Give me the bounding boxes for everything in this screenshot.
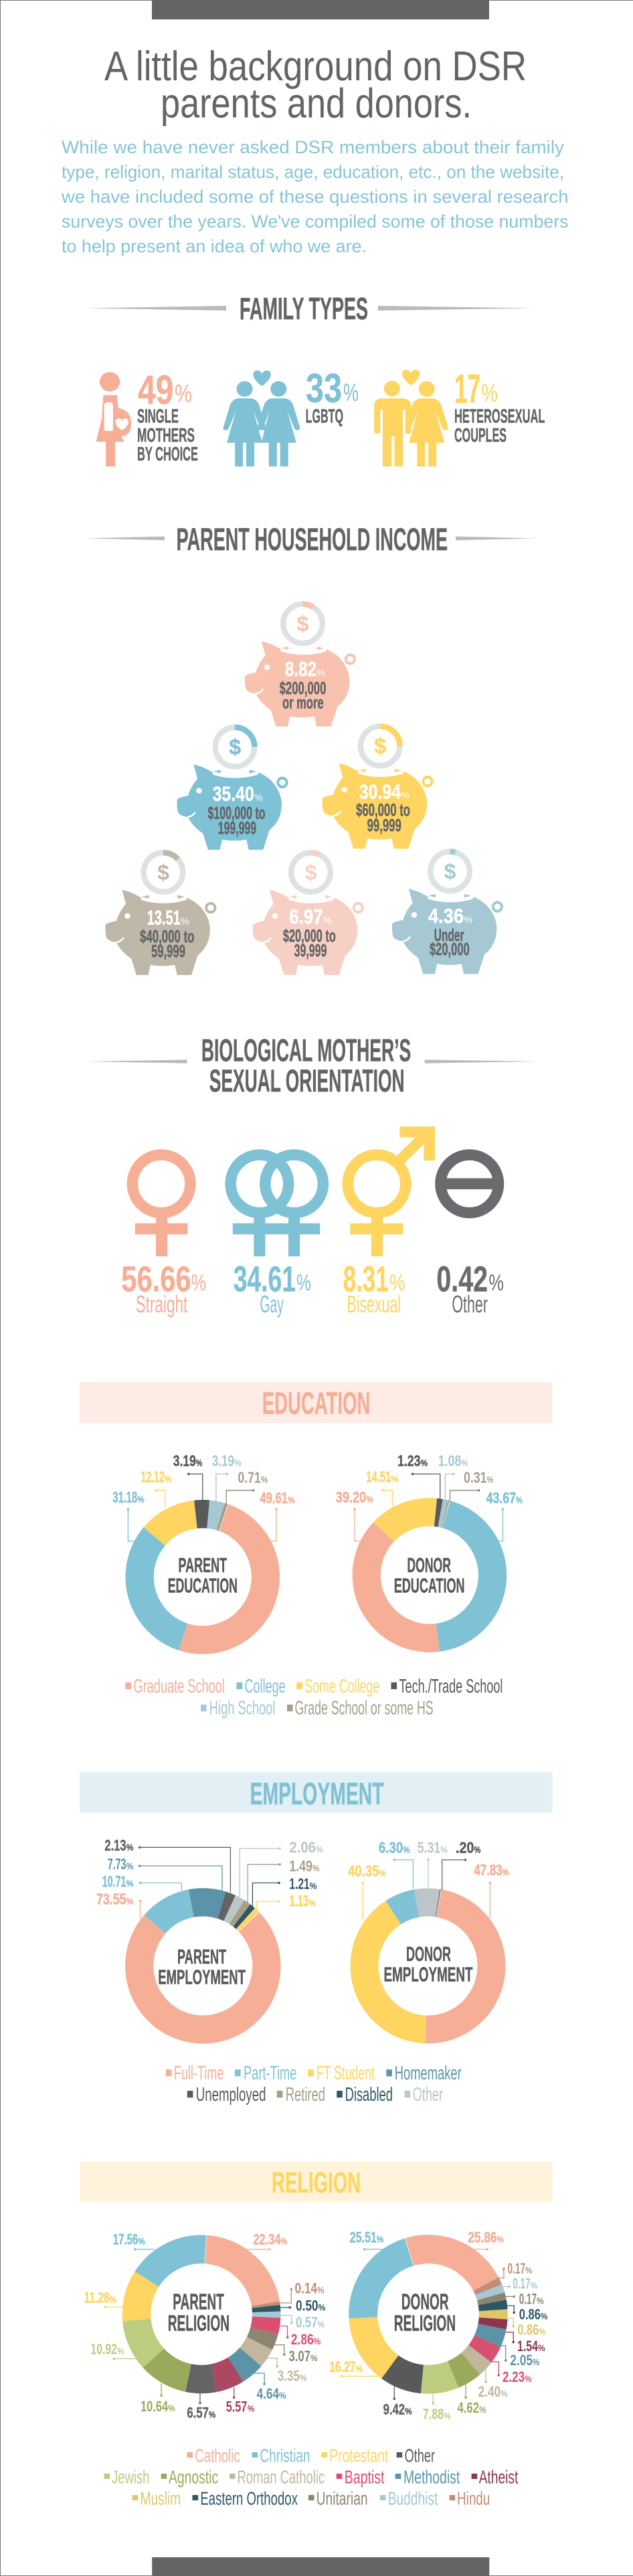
piggy bank: $200,000 or more: $ [297, 612, 309, 636]
stat: straight: 56.66 [121, 1260, 191, 1300]
stat: single mothers by choice: SINGLE [137, 406, 179, 427]
values: parent employment: 7.73 [108, 1855, 126, 1873]
heading: biological mother's sexual orientation [86, 1032, 539, 1098]
legend: religion: Hindu [457, 2488, 490, 2509]
stat: heterosexual couples: HETEROSEXUAL [454, 406, 545, 427]
piggy bank: under $20,000: 4.36 [428, 904, 464, 928]
values: parent religion: % [168, 2403, 175, 2413]
values: parent religion: % [314, 2336, 321, 2346]
leader lines: parent employment [139, 1846, 281, 1919]
stat: other: % [488, 1270, 504, 1296]
legend: education: Some College [304, 1676, 379, 1697]
donut label: parent employment [158, 1945, 246, 1989]
values: parent employment: 2.13 [104, 1836, 126, 1854]
values: donor religion: 25.51 [350, 2229, 377, 2245]
values: parent employment: % [308, 1897, 316, 1908]
donut label: parent religion: PARENT [173, 2290, 224, 2314]
values: parent religion: % [209, 2409, 216, 2419]
values: donor religion: % [479, 2404, 486, 2415]
values: parent religion: 5.57 [226, 2398, 247, 2415]
values: parent religion: % [110, 2294, 116, 2305]
values: parent education: 3.19 [212, 1452, 234, 1469]
values: parent education: 31.18 [112, 1488, 137, 1506]
legend: education: College [245, 1676, 286, 1697]
values: donor religion: % [531, 2280, 537, 2291]
stat: LGBTQ: 33 [306, 365, 342, 411]
values: donor employment: % [440, 1844, 448, 1855]
stat: heterosexual couples [454, 366, 545, 446]
stat: single mothers by choice: MOTHERS [137, 425, 195, 446]
donut chart: donor employment [354, 1892, 502, 2039]
legend: education [126, 1676, 503, 1719]
piggy bank: $20,000 to 39,999 [253, 853, 363, 975]
top bar [152, 0, 489, 19]
donut label: parent education [168, 1553, 238, 1598]
piggy bank: $100,000 to 199,999: 35.40 [213, 782, 254, 806]
values: donor religion: 0.17 [508, 2260, 525, 2277]
values: parent education: 3.19 [173, 1452, 196, 1469]
piggy bank: under $20,000: $ [444, 859, 456, 883]
values: donor religion: 2.05 [510, 2352, 533, 2369]
values: donor education: 43.67 [486, 1489, 516, 1507]
leader lines: parent religion [104, 2248, 293, 2404]
legend: religion: Methodist [403, 2467, 460, 2487]
values: parent religion: % [138, 2236, 145, 2247]
values: parent employment: % [126, 1878, 134, 1889]
legend: religion: Catholic [195, 2445, 240, 2466]
values: donor religion: % [533, 2356, 540, 2367]
values: parent employment: % [126, 1895, 134, 1906]
legend: religion: Unitarian [316, 2488, 368, 2509]
piggy bank: $20,000 to 39,999: 39,999 [294, 940, 327, 960]
stat: straight: % [191, 1270, 206, 1296]
values: donor religion: % [405, 2405, 412, 2416]
values: parent religion: 22.34 [253, 2231, 281, 2248]
leader lines: donor education [353, 1473, 504, 1541]
stat: bisexual [343, 1260, 405, 1318]
values: parent employment: 1.49 [289, 1857, 312, 1875]
stat: single mothers by choice: % [175, 380, 192, 408]
values: parent religion: 17.56 [113, 2231, 138, 2248]
values: parent religion [84, 2231, 326, 2421]
values: parent employment: 10.71 [102, 1873, 126, 1890]
values: donor religion: % [525, 2373, 532, 2384]
values: donor employment: 40.35 [348, 1862, 379, 1879]
donut label: donor religion: DONOR [401, 2290, 449, 2314]
legend: religion [104, 2445, 519, 2509]
values: donor education: 1.23 [397, 1452, 420, 1469]
values: donor employment: % [403, 1844, 410, 1855]
stat: bisexual: Bisexual [347, 1290, 401, 1318]
values: donor religion: 0.86 [517, 2322, 539, 2338]
donut chart: parent employment [113, 1876, 293, 2056]
values: donor employment [348, 1838, 509, 1879]
piggy bank: $60,000 to 99,999: % [401, 790, 410, 802]
piggy bank: $20,000 to 39,999: $20,000 to [283, 926, 336, 946]
legend: religion: Christian [260, 2445, 310, 2466]
title: parents and donors. [161, 80, 472, 127]
donut label: donor employment [384, 1942, 473, 1986]
icon: man and woman with heart [374, 370, 448, 466]
values: donor employment: 47.83 [474, 1861, 502, 1879]
donut label: parent religion: RELIGION [168, 2311, 230, 2336]
values: parent religion: % [300, 2373, 307, 2383]
piggy bank: $200,000 or more [245, 604, 355, 727]
piggy bank: under $20,000: % [464, 914, 472, 926]
values: donor employment: % [379, 1867, 386, 1878]
legend: religion: Baptist [345, 2467, 385, 2487]
stat: gay: Gay [260, 1290, 284, 1318]
values: parent religion: 0.50 [296, 2298, 319, 2314]
piggy bank: $40,000 to 59,999 [105, 853, 215, 975]
piggy bank: $20,000 to 39,999: $ [305, 860, 317, 884]
values: parent education: 49.61 [260, 1489, 288, 1507]
legend: employment: Homemaker [395, 2063, 462, 2084]
values: donor religion: 1.54 [517, 2338, 539, 2354]
values: parent education: % [137, 1494, 145, 1505]
values: donor religion [329, 2229, 548, 2422]
banner: employment [80, 1772, 553, 1812]
values: donor religion: 0.17 [519, 2291, 537, 2308]
values: parent employment: % [310, 1881, 317, 1891]
intro paragraph: surveys over the years. We've compiled some of those numbers [62, 211, 569, 232]
heading: family types: FAMILY TYPES [240, 291, 368, 326]
leader lines: donor religion [341, 2248, 515, 2405]
banner: religion: RELIGION [272, 2166, 361, 2199]
values: donor education: % [366, 1494, 373, 1505]
intro paragraph: we have included some of these questions in several research [61, 187, 569, 207]
values: parent religion: 11.28 [84, 2290, 110, 2306]
values: donor religion: 16.27 [329, 2358, 355, 2375]
donut label: donor employment: DONOR [406, 1942, 451, 1966]
donut chart: donor education [352, 1498, 507, 1652]
legend: religion: Protestant [329, 2445, 388, 2466]
stat: single mothers by choice [137, 367, 198, 465]
values: parent religion: 3.35 [278, 2368, 300, 2385]
legend: religion: Roman Catholic [237, 2467, 325, 2487]
stat: LGBTQ: LGBTQ [306, 406, 343, 427]
legend: religion: Eastern Orthodox [200, 2488, 298, 2509]
piggy bank: $100,000 to 199,999: 199,999 [218, 818, 256, 838]
bottom bar [152, 2557, 489, 2576]
piggy bank: $100,000 to 199,999 [177, 727, 287, 850]
values: donor religion: % [539, 2326, 546, 2337]
donut label: parent employment: PARENT [177, 1945, 226, 1968]
values: donor religion: % [496, 2233, 504, 2244]
values: parent religion: 10.64 [141, 2398, 169, 2415]
values: parent religion: % [317, 2285, 325, 2296]
icon: pregnant single mother [96, 372, 131, 466]
values: donor employment: 6.30 [379, 1838, 403, 1856]
piggy bank: under $20,000: Under [434, 925, 464, 945]
values: donor religion: 9.42 [383, 2401, 405, 2417]
donut label: donor education: DONOR [407, 1553, 451, 1577]
piggy bank: $60,000 to 99,999: 99,999 [367, 815, 401, 835]
title [104, 44, 527, 127]
piggy bank: $60,000 to 99,999 [323, 726, 432, 849]
stat: straight [121, 1260, 206, 1318]
values: parent religion: % [317, 2318, 325, 2329]
values: donor religion: % [538, 2342, 545, 2353]
stat: gay [234, 1260, 311, 1318]
stat: gay: % [296, 1270, 311, 1296]
stat: other: Other [452, 1290, 488, 1318]
icon: female symbol [132, 1155, 190, 1256]
piggy bank: $40,000 to 59,999: $ [157, 860, 169, 884]
legend: employment: FT Student [316, 2063, 375, 2084]
banner: employment: EMPLOYMENT [250, 1776, 384, 1811]
values: donor religion: 7.88 [423, 2405, 444, 2422]
legend: education: Tech./Trade School [399, 1676, 503, 1697]
values: parent education: % [165, 1474, 172, 1484]
stat: heterosexual couples: 17 [454, 366, 480, 412]
values: donor religion: 2.23 [503, 2369, 525, 2385]
values: parent religion: 3.07 [289, 2348, 310, 2365]
values: parent religion: % [248, 2403, 255, 2413]
values: donor education: % [391, 1474, 399, 1484]
legend: religion: Agnostic [169, 2467, 218, 2487]
donut chart: donor religion [347, 2233, 509, 2395]
values: parent religion: 0.57 [296, 2314, 317, 2330]
donut label: parent employment: EMPLOYMENT [158, 1965, 246, 1989]
donut label: donor education [394, 1553, 464, 1598]
values: donor education: 1.08 [438, 1452, 461, 1469]
stat: other [436, 1260, 504, 1318]
legend: employment: Unemployed [196, 2084, 266, 2106]
values: parent education: % [288, 1494, 295, 1505]
leader lines: donor employment [361, 1859, 491, 1921]
piggy bank: $60,000 to 99,999: 30.94 [359, 780, 401, 804]
stat: straight: Straight [136, 1290, 187, 1318]
values: donor religion: 0.17 [513, 2276, 531, 2292]
legend: employment: Other [413, 2084, 443, 2106]
piggy bank: $40,000 to 59,999: % [181, 916, 189, 927]
values: donor education: 39.20 [336, 1488, 366, 1506]
values: donor education: % [516, 1494, 523, 1505]
legend: education: High School [209, 1697, 275, 1719]
values: parent education: 0.71 [238, 1469, 261, 1486]
values: parent religion: % [279, 2390, 286, 2401]
values: donor education: 0.31 [464, 1469, 487, 1486]
values: donor religion: % [537, 2296, 544, 2306]
values: donor religion: % [377, 2233, 384, 2244]
values: donor employment: % [502, 1867, 509, 1877]
values: donor education: 14.51 [366, 1468, 391, 1486]
icon: female and male symbol [348, 1126, 435, 1256]
piggy bank: $20,000 to 39,999: 6.97 [289, 905, 323, 928]
values: donor employment: % [474, 1844, 481, 1855]
donut label: parent education: PARENT [178, 1553, 227, 1577]
values: donor education [336, 1452, 523, 1507]
values: parent employment: % [126, 1861, 134, 1871]
banner: education: EDUCATION [262, 1385, 370, 1420]
values: donor religion: % [541, 2310, 548, 2321]
values: donor education: % [461, 1457, 468, 1468]
stat: heterosexual couples: COUPLES [454, 425, 507, 446]
legend: religion: Muslim [141, 2488, 181, 2509]
values: parent religion: % [117, 2346, 124, 2356]
values: parent religion: % [310, 2352, 318, 2363]
icon: other symbol [440, 1155, 499, 1213]
heading: family types [86, 291, 535, 326]
piggy bank: $200,000 or more: or more [282, 692, 324, 712]
piggy bank: $100,000 to 199,999: $ [229, 735, 241, 759]
values: parent religion: 10.92 [90, 2341, 117, 2358]
values: parent employment: 2.06 [289, 1838, 316, 1856]
intro paragraph: type, religion, marital status, age, education, etc., on the website, [62, 162, 564, 182]
intro paragraph [61, 137, 569, 256]
stat: bisexual: 8.31 [343, 1260, 389, 1300]
values: parent education: % [261, 1474, 268, 1485]
values: parent employment: 1.21 [289, 1875, 310, 1893]
legend: religion: Buddhist [388, 2488, 438, 2509]
piggy bank: $100,000 to 199,999: $100,000 to [207, 802, 265, 823]
values: donor religion: 4.62 [458, 2399, 479, 2416]
banner: education [80, 1382, 553, 1424]
values: parent religion: 4.64 [257, 2385, 280, 2402]
legend: employment: Full-Time [174, 2063, 223, 2084]
piggy bank: $40,000 to 59,999: $40,000 to [140, 926, 194, 946]
piggy bank: $200,000 or more: 8.82 [285, 657, 316, 681]
values: parent education: % [196, 1457, 203, 1468]
values: donor religion: 2.40 [478, 2383, 501, 2400]
values: parent employment: 1.13 [289, 1892, 308, 1909]
intro paragraph: to help present an idea of who we are. [62, 236, 367, 256]
icon: double female symbol [231, 1155, 323, 1256]
donut chart: parent education [122, 1496, 283, 1658]
values: donor religion: % [525, 2265, 533, 2276]
donut label: donor education: EDUCATION [394, 1574, 464, 1598]
values: parent religion: 0.14 [294, 2280, 318, 2297]
stat: bisexual: % [389, 1270, 405, 1296]
legend: education: Graduate School [134, 1676, 225, 1697]
legend: employment [166, 2063, 462, 2106]
heading: biological mother's sexual orientation: SEXUAL ORIENTATION [209, 1063, 405, 1098]
legend: religion: Other [405, 2445, 435, 2466]
piggy bank: $40,000 to 59,999: 13.51 [147, 906, 181, 929]
values: parent employment: % [126, 1842, 134, 1853]
piggy bank: under $20,000: $20,000 [430, 939, 470, 959]
values: donor employment: 5.31 [418, 1838, 440, 1856]
banner: religion [80, 2162, 553, 2202]
values: donor religion: 25.86 [468, 2229, 496, 2245]
stat: heterosexual couples: % [481, 379, 498, 407]
intro paragraph: While we have never asked DSR members about their family [62, 137, 565, 157]
values: donor religion: 0.86 [519, 2306, 541, 2322]
heading: parent household income [86, 521, 536, 557]
legend: education: Grade School or some HS [294, 1697, 434, 1719]
values: parent religion: % [281, 2236, 287, 2247]
values: parent religion: 6.57 [187, 2404, 209, 2421]
stat: LGBTQ [306, 365, 359, 427]
donut label: parent education: EDUCATION [168, 1574, 238, 1598]
values: donor religion: % [444, 2410, 451, 2421]
piggy bank: $100,000 to 199,999: % [254, 792, 263, 804]
leader lines: parent education [127, 1473, 278, 1541]
piggy bank: $200,000 or more: % [316, 667, 325, 679]
icon: two women with heart [223, 371, 300, 466]
values: donor education: % [420, 1457, 428, 1468]
piggy bank: $40,000 to 59,999: 59,999 [151, 941, 185, 961]
stat: single mothers by choice: BY CHOICE [137, 444, 198, 465]
piggy bank: $200,000 or more: $200,000 [280, 678, 326, 698]
piggy bank: under $20,000 [392, 851, 502, 974]
values: donor employment: .20 [456, 1838, 474, 1856]
donut chart: parent religion [132, 2245, 271, 2383]
stat: other: 0.42 [436, 1260, 488, 1300]
piggy bank: $60,000 to 99,999: $ [374, 734, 386, 758]
donut label: parent religion [168, 2290, 230, 2336]
values: parent religion: % [319, 2302, 326, 2313]
values: parent religion: 2.86 [291, 2331, 314, 2348]
stat: gay: 34.61 [234, 1260, 296, 1300]
values: parent employment: % [312, 1863, 320, 1873]
donut label: donor employment: EMPLOYMENT [384, 1962, 473, 1986]
title: A little background on DSR [104, 44, 527, 90]
legend: employment: Part-Time [244, 2063, 296, 2084]
values: parent education [112, 1452, 295, 1507]
values: parent education: 12.12 [141, 1468, 165, 1486]
values: parent employment: % [316, 1844, 323, 1855]
legend: employment: Retired [286, 2084, 325, 2106]
stat: LGBTQ: % [343, 379, 359, 406]
values: parent education: % [234, 1457, 242, 1468]
values: parent employment [96, 1836, 323, 1909]
donut label: donor religion [394, 2290, 456, 2336]
piggy bank: $20,000 to 39,999: % [323, 915, 332, 926]
legend: religion: Atheist [479, 2467, 519, 2487]
values: donor religion: % [501, 2388, 508, 2399]
donut label: donor religion: RELIGION [394, 2311, 456, 2336]
stat: single mothers by choice: 49 [138, 367, 173, 412]
values: parent employment: 73.55 [96, 1890, 126, 1907]
legend: religion: Jewish [112, 2467, 149, 2487]
values: donor religion: % [355, 2363, 363, 2374]
values: donor education: % [487, 1474, 494, 1485]
heading: biological mother's sexual orientation: BIOLOGICAL MOTHER’S [201, 1032, 411, 1067]
legend: employment: Disabled [345, 2084, 393, 2106]
piggy bank: $60,000 to 99,999: $60,000 to [356, 800, 410, 820]
